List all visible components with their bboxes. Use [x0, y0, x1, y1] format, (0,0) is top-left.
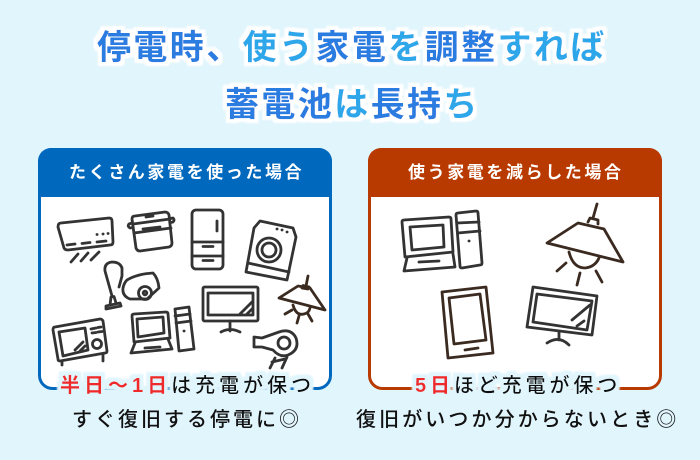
icon: flat-screen monitor	[203, 287, 258, 332]
icon: ceiling lamp	[547, 204, 623, 285]
icon: hair dryer	[254, 331, 297, 368]
caption: short outage: すぐ復旧する停電に◎	[72, 408, 302, 431]
panel: many appliances	[38, 148, 332, 397]
icon: washing machine	[246, 221, 296, 280]
title	[97, 29, 607, 124]
icon: rice cooker	[128, 212, 174, 251]
panel header: fewer appliances	[368, 148, 662, 197]
icon: desktop computer	[402, 211, 482, 271]
icon: tablet	[442, 287, 493, 358]
icon: vacuum cleaner	[105, 262, 159, 309]
panel: fewer appliances	[368, 148, 662, 397]
icon: monitor	[527, 287, 597, 345]
title: 停電時、使う家電を調整すれば	[97, 29, 607, 67]
panel header: fewer appliances: 使う家電を減らした場合	[408, 162, 624, 182]
callout text: half a day to a day: 半日〜1日は充電が保つ	[60, 374, 315, 397]
caption: unknown recovery: 復旧がいつか分からないとき◎	[356, 408, 679, 431]
title: 蓄電池は長持ち	[225, 86, 480, 124]
callout text: five days: 5日ほど充電が保つ	[415, 374, 621, 397]
panel header: many appliances: たくさん家電を使った場合	[69, 162, 304, 182]
icon: microwave	[53, 319, 107, 365]
icon: ceiling lamp small	[279, 276, 325, 323]
icon: desktop computer small	[131, 307, 194, 353]
icon: refrigerator	[192, 210, 223, 269]
icon: air conditioner	[58, 218, 113, 262]
panel header: many appliances	[38, 148, 332, 197]
